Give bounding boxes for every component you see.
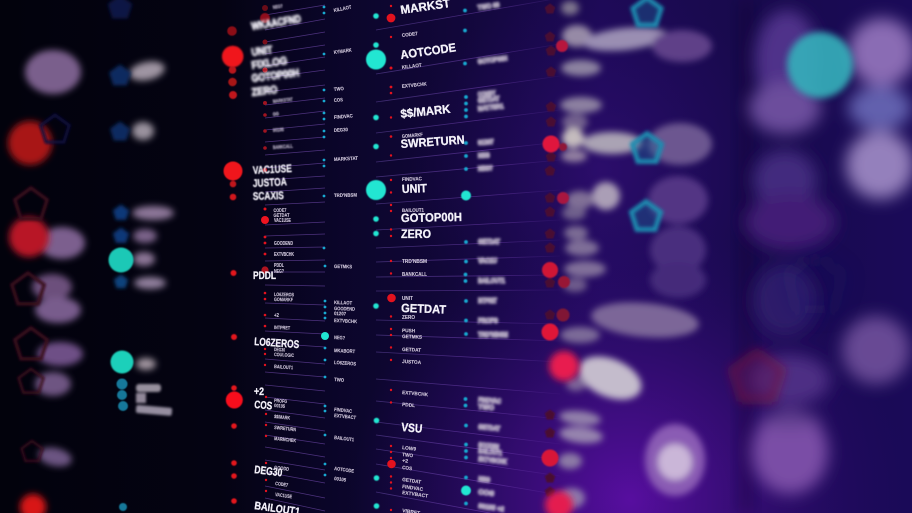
column 1 headings: VAC1USE	[253, 163, 292, 177]
column 2 headings: GETDAT	[401, 301, 447, 317]
column 1 small labels: $$/MARK	[274, 414, 291, 422]
column 2 headings: $$/MARK	[400, 102, 451, 121]
column 1 right labels: DEG30	[334, 127, 348, 134]
column 1 small labels: INTPRET	[274, 325, 290, 332]
column 1 small labels: PDDL	[274, 263, 284, 269]
column 2 small labels: EXTVBACT	[402, 490, 428, 500]
column 2 headings: AOTCODE	[399, 40, 457, 62]
column 1 small labels: EXTVBCHK	[274, 252, 294, 258]
column 1 headings: UNIT	[251, 44, 273, 59]
column 3 blurred labels: NEG	[478, 476, 491, 485]
column 2 headings: ZERO	[401, 227, 431, 241]
column 1 right labels: EXTVBACT	[334, 413, 356, 421]
column 2 red dots	[387, 5, 396, 511]
column 2 small labels: LOW9	[402, 445, 417, 453]
column 1 right labels: KYMARK	[333, 47, 352, 56]
red left nodes	[8, 121, 52, 513]
column 1 right labels: 00105	[334, 476, 347, 484]
column 1 right labels: GETMKS	[334, 264, 353, 270]
column 3 blurred labels: BAILOUT1	[478, 448, 502, 458]
column 3 blurred labels: TWO	[478, 404, 495, 412]
column 3 blurred labels: BAILOUT1	[478, 278, 505, 285]
column 1 right labels: TWO	[334, 377, 344, 384]
column 2 small labels: EXTVBCHK	[402, 81, 427, 90]
column 1 right labels: TRD'NBSM	[334, 193, 357, 199]
column 1 small labels: 00105	[274, 403, 285, 410]
far right: big cyan node	[787, 32, 853, 98]
column 2 small labels: FINDVAC	[402, 484, 424, 493]
column 1 headings: FIXLOG	[251, 55, 288, 72]
column 1 headings: PDDL	[253, 270, 276, 282]
column 3 blurred labels: TWO 00	[477, 2, 500, 12]
column 2 small labels: COS	[402, 465, 413, 472]
column 1 right cyan dots	[321, 6, 329, 476]
column 2 small labels: ZERO	[402, 315, 415, 321]
column 2 small labels: PUSH	[402, 328, 415, 334]
column 3 blurred labels: EXTVBCHK	[478, 456, 507, 466]
outer red markers, column 1	[222, 26, 244, 504]
column 1 small labels: MARKSTAT	[273, 97, 293, 105]
column 1 right labels: KILLAOT	[333, 5, 352, 14]
column 2 small labels: GETDAT	[402, 477, 421, 486]
column 4: red glowing nodes	[542, 40, 579, 513]
column 1 right labels: KILLAOT	[334, 300, 352, 307]
column 3 blurred labels: COMBY	[477, 90, 496, 99]
column 1 headings: SCAXIS	[253, 190, 284, 203]
column 3 blurred labels: GOTOP00H	[477, 55, 508, 66]
column 2 small labels: GETMKS	[402, 334, 423, 341]
column 2 small labels	[402, 31, 429, 513]
column 2 small labels: +2	[402, 458, 409, 465]
column 3 blurred labels: NEG	[478, 152, 491, 160]
far right: red pentagon ring	[731, 351, 783, 400]
column 1 small labels: CODE7	[273, 208, 287, 214]
column 2 headings: VSU	[401, 420, 423, 436]
column 1 small labels: BANKCALL	[273, 144, 293, 151]
column 3 blurred labels: GOODEN	[478, 442, 499, 451]
column 1 small labels: COULOGIC	[274, 352, 294, 359]
column 1 headings	[251, 13, 302, 513]
column 2 small labels: TRD'NBSM	[402, 259, 427, 265]
column 1 right labels: MARKSTAT	[334, 156, 358, 163]
column 1 right labels: MKABORT	[334, 348, 355, 355]
column 5: teal rings	[631, 0, 662, 230]
column 3 blurred labels: VAC1U	[478, 258, 497, 265]
column 2 small labels: GETDAT	[402, 347, 421, 354]
column 1 right labels: BAILOUT1	[334, 435, 355, 443]
column 2 small labels: CODE7	[402, 31, 418, 39]
column 1 right labels: FINDVAC	[334, 407, 353, 415]
column 1 right labels: LO6ZEROS	[334, 360, 357, 368]
column 2 small labels: KILLAOT	[402, 63, 422, 71]
column 2 small labels: FINDVAC	[402, 176, 422, 183]
column 1 right labels: GOODEND	[334, 306, 355, 313]
column 2 headings	[399, 0, 465, 436]
column 1 small labels: SWRETURN	[274, 425, 297, 433]
column 1 right labels: NEG?	[334, 335, 345, 342]
column 3 blurred labels: NEG?	[478, 165, 493, 173]
column 2 cyan nodes	[366, 13, 386, 509]
column 1 headings: DEG30	[254, 464, 283, 479]
column 1 small labels: 00105	[273, 127, 284, 134]
column 1 small labels: GOMARKF	[274, 297, 293, 303]
column 1 headings: GOTOP00H	[251, 67, 300, 85]
column 3 blurred labels: MAT7ER1	[477, 103, 504, 113]
column 2 small labels: EXTVBCHK	[402, 390, 429, 398]
blurred blue pentagon markers	[108, 0, 132, 288]
far right: large blurred lilac labels	[745, 10, 912, 494]
column 2 headings: GOTOP00H	[401, 210, 462, 225]
left column: blurred foreground labels and markers	[8, 0, 174, 513]
column 2 small labels: JUSTOA	[402, 359, 422, 366]
column 1 headings: JUSTOA	[253, 176, 287, 190]
column 3 cyan dots	[461, 9, 471, 505]
column 1 headings: ZERO	[251, 84, 279, 99]
column 1 headings: WKAACFND	[251, 13, 302, 33]
column 3 blurred labels: PROFG	[478, 318, 498, 325]
column 1 small labels: NEG?	[272, 4, 283, 11]
column 3 blurred labels: 01207	[478, 139, 494, 147]
column 1 headings: +2	[254, 386, 264, 398]
column 1 right labels: AOTCODE	[334, 466, 355, 475]
column 3 blurred labels: TRD'NBSM	[478, 332, 508, 339]
column 1 row lines	[265, 5, 325, 511]
column 1 right labels: TWO	[334, 86, 344, 93]
column 3 blurred labels	[477, 2, 508, 513]
cyan left nodes	[108, 248, 134, 272]
column 1 right labels: COS	[334, 97, 344, 104]
column 2 headings: SWRETURN	[400, 133, 465, 151]
column 3 blurred labels: COS	[478, 489, 495, 498]
column 1 small labels: NEG?	[274, 269, 284, 275]
column 1 small labels: MARMCHEK	[274, 436, 297, 444]
column 1 small labels: DEG30	[274, 347, 285, 354]
column 1 small labels: +2	[274, 313, 279, 319]
column 2 small labels: UNIT	[402, 296, 413, 302]
column 2 headings: UNIT	[402, 181, 428, 196]
column 1 right labels: EXTVBCHK	[334, 318, 357, 325]
column 3 blurred labels: INTPRET	[478, 298, 497, 305]
column 1 small labels: VAC1USE	[274, 218, 291, 224]
column 2 small labels: PDDL	[402, 402, 415, 409]
column 1 right labels	[333, 5, 358, 484]
column 3 blurred labels: FINDVAC	[478, 397, 501, 406]
column 1 small labels: GOODD	[274, 465, 290, 473]
column 1 small labels: PROFG	[274, 398, 287, 405]
column 2 small labels: GOMARKF	[402, 132, 423, 140]
column 2 small labels: BAILOUT1	[402, 208, 424, 214]
column 2 small labels: BANKCALL	[402, 272, 427, 278]
column 3 blurred labels: GETDAT	[478, 239, 501, 246]
column 1 small labels: VAC1USE	[275, 492, 293, 500]
column 1 small labels: BAILOUT1	[274, 364, 293, 371]
column 1 small labels: CODE7	[275, 481, 289, 489]
column 3 blurred labels: GETDAT	[477, 96, 501, 105]
column 2 row lines	[376, 0, 560, 513]
column 1 small labels: LO6ZEROS	[274, 292, 295, 298]
column 4: dark red pentagon markers	[545, 4, 556, 496]
column 4: blurred labels	[558, 1, 712, 508]
column 1 small labels	[272, 4, 297, 500]
column 1 right labels: 01207	[334, 311, 346, 317]
column 1 headings: LO6ZEROS	[254, 336, 300, 351]
far right: blue pentagon ring	[786, 255, 844, 309]
column 1 small labels: GOODEND	[274, 241, 293, 247]
column 1 right labels: FINDVAC	[334, 113, 353, 121]
column 2 small labels: TWO	[402, 452, 414, 459]
inner red markers, column 1	[260, 5, 270, 492]
column 1 headings: COS	[254, 399, 273, 413]
column 3 blurred labels: GETDAT	[478, 424, 501, 433]
column 1 small labels: 00	[273, 111, 279, 118]
column 1 small labels: GETDAT	[273, 213, 290, 219]
